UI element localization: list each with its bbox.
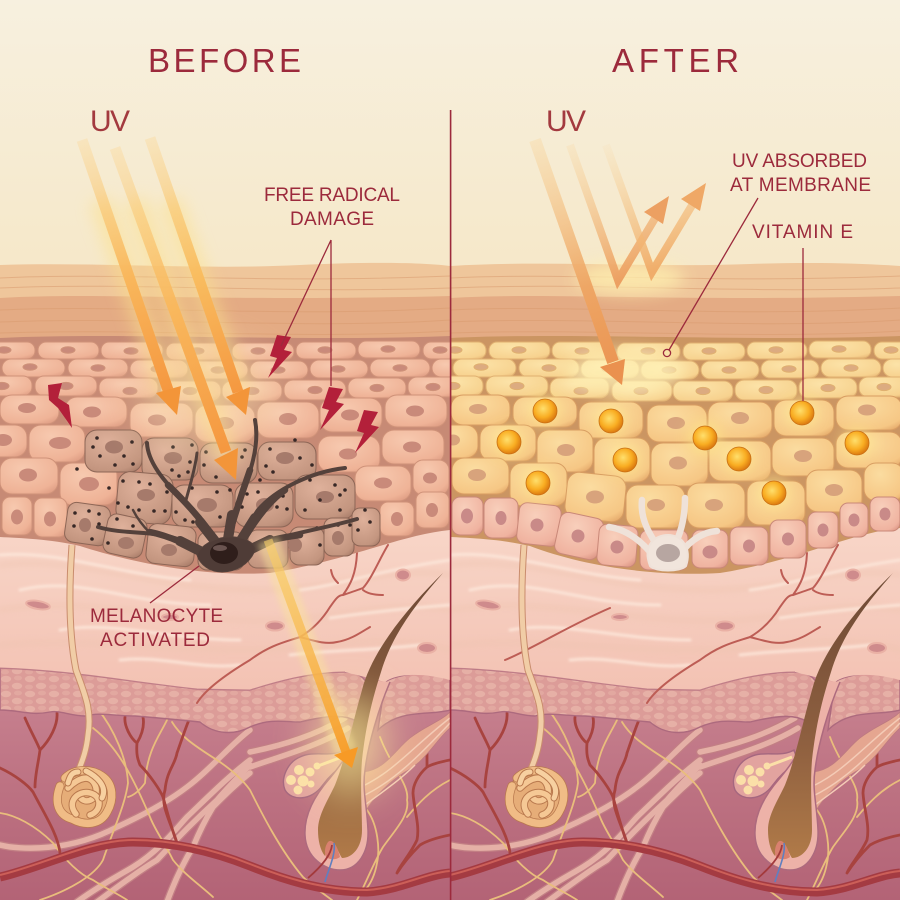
epidermis cell layer bbox=[0, 336, 466, 574]
reflected UV arrow 2 bbox=[606, 145, 706, 272]
background bbox=[0, 0, 900, 270]
stratum lucidum band bbox=[450, 276, 900, 345]
stratum corneum bbox=[451, 263, 900, 298]
resting melanocyte bbox=[609, 498, 717, 570]
label: free radical damage: FREE RADICAL bbox=[264, 185, 400, 206]
arrector muscle bbox=[363, 712, 450, 812]
melanin dots bbox=[74, 438, 370, 545]
label: UV before: UV bbox=[90, 105, 130, 138]
sebaceous gland bbox=[733, 750, 798, 798]
leader line: vitamin E bbox=[802, 248, 804, 401]
lower dermis: vessels, gland and fibres bbox=[450, 668, 900, 900]
arrow 2 bbox=[115, 148, 238, 480]
sweat gland bbox=[57, 769, 112, 823]
panel: after bbox=[436, 140, 900, 900]
arrow 3 bbox=[150, 138, 250, 415]
label: melanocyte activated: ACTIVATED bbox=[100, 630, 210, 651]
label: vitamin E: VITAMIN E bbox=[752, 222, 853, 243]
dermis bbox=[450, 525, 900, 703]
penetrating UV arrow bbox=[535, 140, 625, 385]
hair follicle bbox=[305, 573, 443, 882]
reflection glow bbox=[575, 262, 685, 294]
stratum lucidum band bbox=[0, 276, 450, 345]
label: UV absorbed at membrane bbox=[730, 151, 871, 196]
epidermis cell layer bbox=[436, 336, 900, 574]
glow under absorbed UV bbox=[565, 350, 685, 394]
title: after: AFTER bbox=[612, 42, 739, 79]
nerve to sweat gland bbox=[522, 545, 541, 775]
title: before: BEFORE bbox=[148, 42, 301, 79]
sebaceous gland bbox=[283, 750, 348, 798]
extra dermal vessel bbox=[505, 608, 610, 660]
lower dermis: vessels, gland and fibres bbox=[0, 668, 450, 900]
centre divider bbox=[450, 110, 451, 900]
hair follicle bbox=[755, 573, 893, 882]
lightning bolt 2 bbox=[268, 335, 292, 378]
nerve to sweat gland bbox=[70, 545, 89, 775]
membrane marker bbox=[663, 349, 671, 357]
label: UV after: UV bbox=[546, 105, 586, 138]
lightning bolt 1 bbox=[48, 383, 72, 428]
label: free radical damage: DAMAGE bbox=[290, 209, 374, 230]
deep UV beam into follicle bbox=[268, 540, 388, 795]
leader lines: free radical bbox=[281, 240, 331, 386]
melanocyte activated bbox=[98, 420, 357, 572]
sweat gland bbox=[509, 769, 564, 823]
arrow 1 bbox=[82, 140, 181, 415]
reflected UV arrow 1 bbox=[570, 145, 669, 280]
stratum corneum bbox=[0, 262, 450, 298]
glow around UV arrows bbox=[135, 345, 275, 445]
label: melanocyte activated bbox=[90, 606, 223, 651]
label: melanocyte activated: MELANOCYTE bbox=[90, 606, 223, 627]
label: UV absorbed at membrane: AT MEMBRANE bbox=[730, 175, 871, 196]
label: free radical damage bbox=[264, 185, 400, 230]
panel: before bbox=[0, 138, 466, 900]
lightning bolt 3 bbox=[320, 387, 344, 430]
vitamin E spheres bbox=[495, 397, 871, 507]
arrector muscle bbox=[813, 712, 900, 812]
label: UV absorbed at membrane: UV ABSORBED bbox=[732, 151, 867, 172]
leader line: membrane bbox=[669, 198, 758, 350]
lightning bolt 4 bbox=[355, 410, 379, 453]
dermis bbox=[0, 525, 450, 703]
leader line: melanocyte bbox=[150, 566, 199, 603]
UV arrows bbox=[82, 138, 250, 480]
